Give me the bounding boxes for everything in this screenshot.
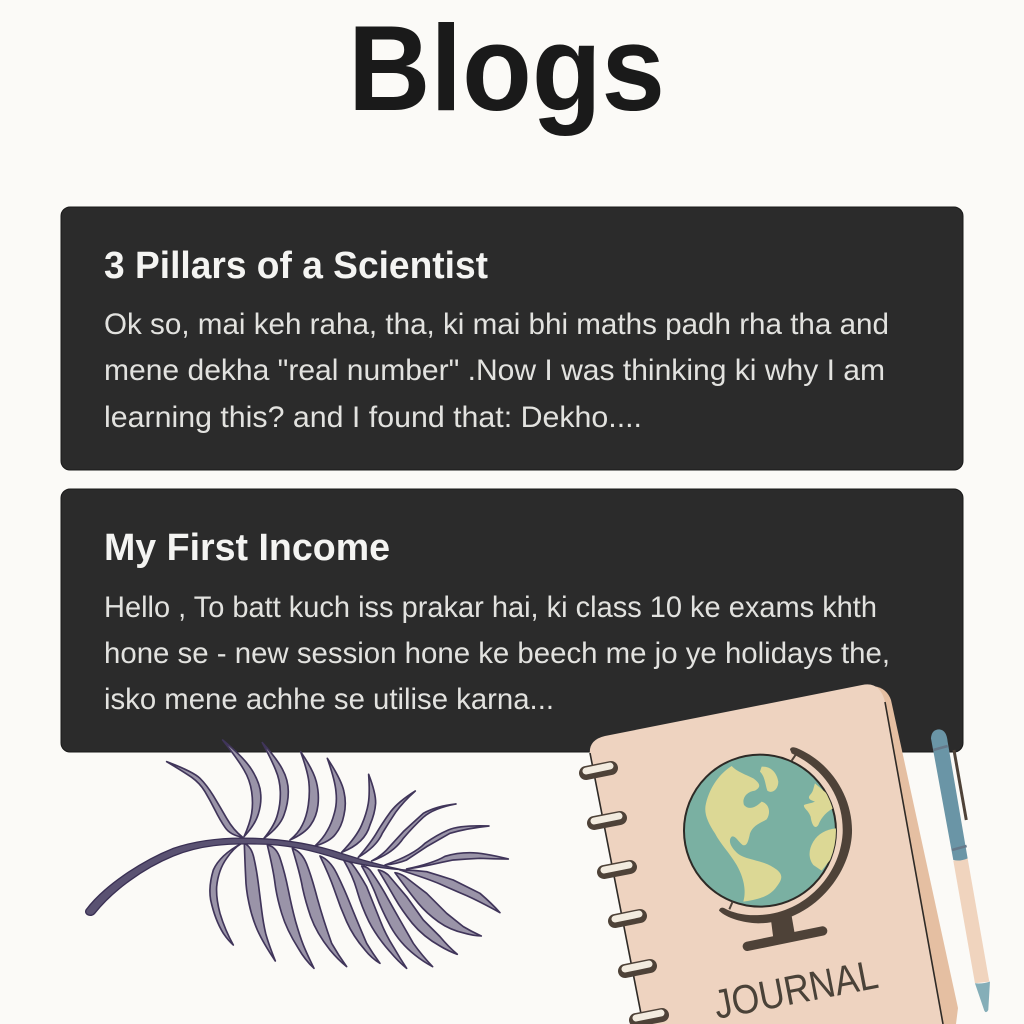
icon: fern leaf — [86, 740, 508, 968]
globe base — [747, 931, 823, 946]
pen tip — [975, 982, 990, 1012]
panel: My First Income — [61, 489, 963, 752]
pen bands — [933, 746, 967, 850]
fern stem — [86, 838, 403, 915]
heading: My First Income: My First Income — [104, 527, 390, 569]
journal front cover — [590, 684, 943, 1024]
journal back cover — [870, 686, 958, 1024]
spiral rings — [586, 766, 662, 1020]
title: Blogs — [348, 0, 665, 136]
globe sphere — [684, 755, 836, 907]
pen barrel — [953, 858, 989, 983]
pen grip — [931, 729, 968, 861]
icon: journal notebook — [586, 684, 958, 1024]
panel: 3 Pillars of a Scientist — [61, 207, 963, 470]
journal edges — [590, 702, 943, 1024]
text block: blog excerpt: mene dekha "real number" .Now I was thinking ki why I am — [104, 354, 885, 387]
globe neck — [771, 916, 795, 938]
icon: globe — [684, 747, 852, 946]
text block: blog excerpt — [104, 591, 890, 716]
globe arm connectors — [729, 753, 797, 909]
text block: blog excerpt: Ok so, mai keh raha, tha, ki mai bhi maths padh rha tha and — [104, 308, 889, 341]
text block: blog excerpt: hone se - new session hone ke beech me jo ye holidays the, — [104, 637, 890, 670]
continents — [705, 766, 837, 902]
text block: blog excerpt: isko mene achhe se utilise karna... — [104, 683, 554, 716]
text block: blog excerpt: Hello , To batt kuch iss prakar hai, ki class 10 ke exams khth — [104, 591, 877, 624]
text block: blog excerpt — [104, 308, 889, 434]
text block: blog excerpt: learning this? and I found that: Dekho.... — [104, 401, 642, 434]
pen clip — [954, 750, 966, 820]
globe arm — [719, 747, 852, 923]
heading: 3 Pillars of a Scientist: 3 Pillars of a Scientist — [104, 245, 488, 287]
icon: pen — [931, 729, 990, 1012]
